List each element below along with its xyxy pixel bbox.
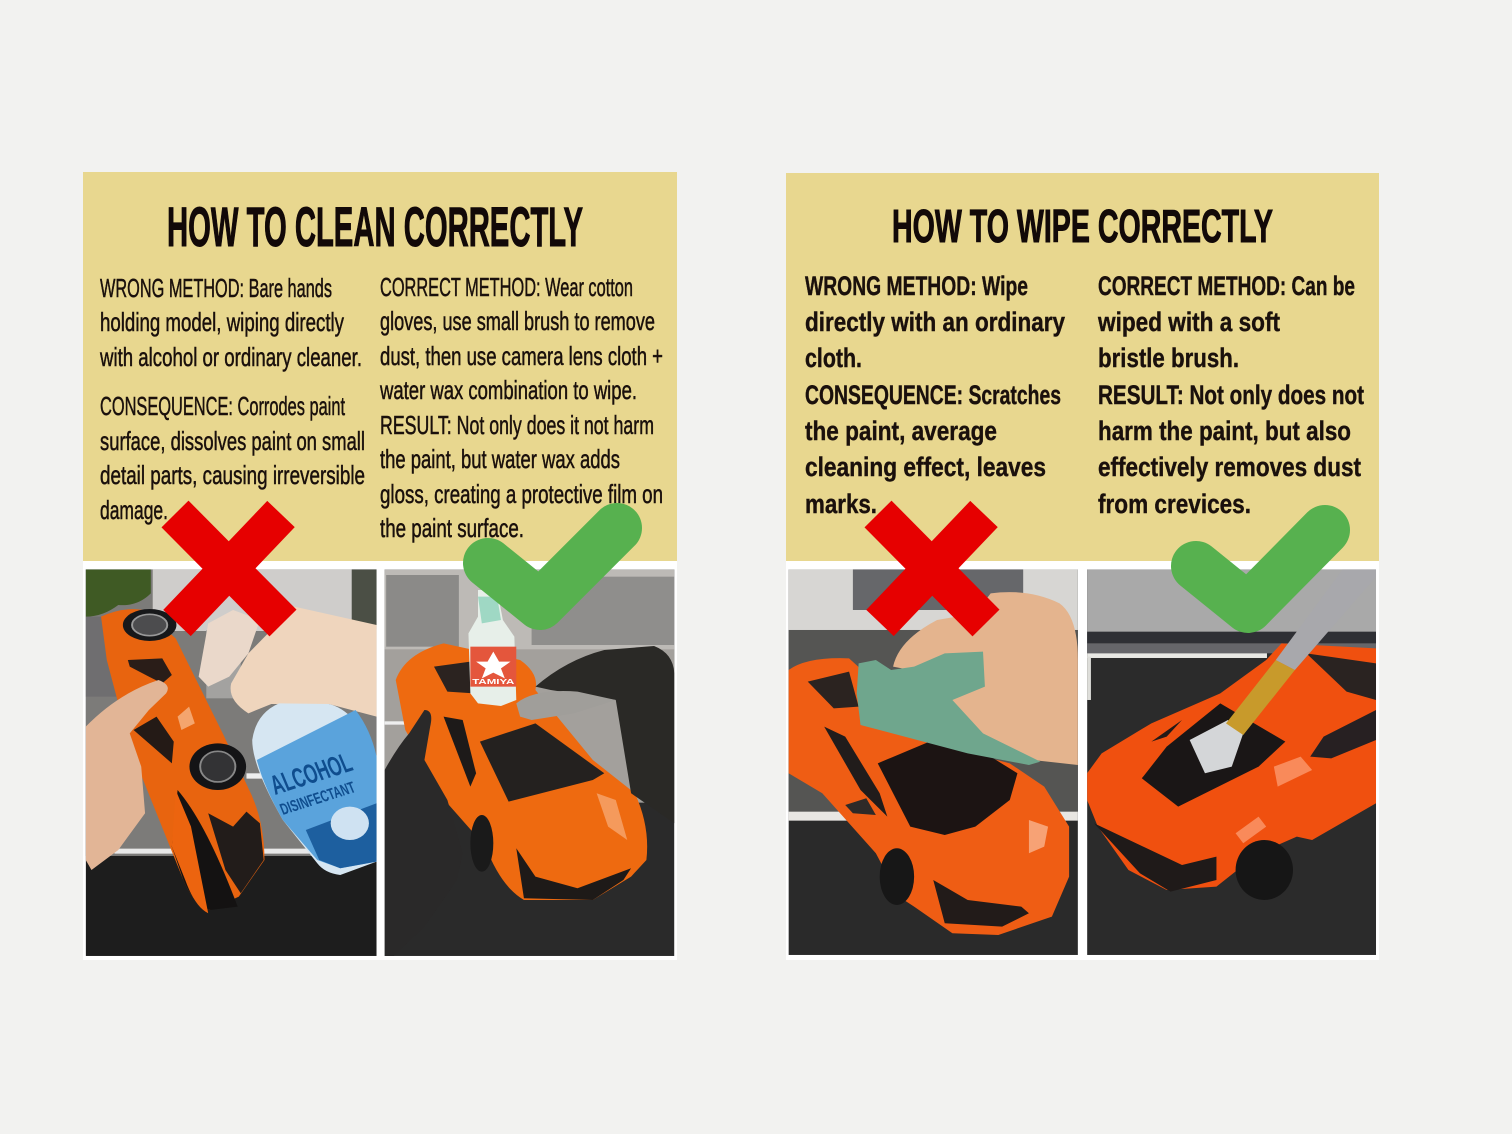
text block: correct method and result: the paint, but water wax adds [380,444,620,474]
text block: correct method and result: water wax combination to wipe. [379,375,637,405]
photo: hand wiping model with cloth [789,569,1078,955]
photo: bare hands spraying alcohol on model: ALCOHOL [266,747,357,801]
text block: correct method and result: RESULT: Not only does not [1098,380,1364,410]
text block: wrong method and consequence: holding model, wiping directly [100,307,344,337]
photo: soft bristle brush on model [1087,569,1376,955]
text block: wrong method and consequence: CONSEQUENCE: Corrodes paint [100,391,345,421]
text block: wrong method and consequence [99,273,365,525]
text block: correct method and result: bristle brush. [1098,343,1239,373]
icon: green check [488,528,617,605]
text block: wrong method and consequence [805,271,1065,519]
icon: red cross [878,514,986,623]
panel background yellow [786,173,1379,561]
text block: correct method and result: effectively removes dust [1098,452,1361,482]
text block: wrong method and consequence: damage. [100,495,168,525]
text block: wrong method and consequence: surface, dissolves paint on small [100,426,365,456]
icon: red cross [175,514,283,623]
panel: how to wipe correctly [786,173,1379,960]
text block: correct method and result: dust, then use camera lens cloth + [380,341,663,371]
icon: green check [1196,530,1325,608]
text block: wrong method and consequence: CONSEQUENCE: Scratches [805,380,1061,410]
text block: wrong method and consequence: cleaning effect, leaves [805,452,1046,482]
text block: correct method and result: the paint surface. [380,513,524,543]
photo: gloved hands with water wax on model: TAMIYA [472,677,515,686]
panel: how to clean correctly [83,172,677,960]
text block: correct method and result [1097,271,1364,519]
text block: wrong method and consequence: detail parts, causing irreversible [100,460,365,490]
text block: correct method and result: RESULT: Not only does it not harm [380,410,654,440]
text block: correct method and result: CORRECT METHOD: Can be [1098,271,1355,301]
text block: correct method and result: harm the paint, but also [1098,416,1351,446]
text block: wrong method and consequence: marks. [805,489,877,519]
text block: correct method and result: gloves, use small brush to remove [380,306,655,336]
text block: wrong method and consequence: the paint, average [805,416,997,446]
text block: wrong method and consequence: WRONG METHOD: Bare hands [100,273,332,303]
text block: wrong method and consequence: cloth. [805,343,862,373]
panel background yellow [83,172,677,561]
photo: bare hands spraying alcohol on model [86,569,377,956]
text block: correct method and result: wiped with a soft [1097,307,1280,337]
heading: how to wipe correctly: HOW TO WIPE CORRECTLY [892,200,1273,252]
heading: how to clean correctly: HOW TO CLEAN CORRECTLY [167,195,583,258]
photo: gloved hands with water wax on model [385,569,674,956]
text block: wrong method and consequence: directly with an ordinary [805,307,1065,337]
text block: correct method and result: from crevices. [1098,489,1251,519]
text block: wrong method and consequence: with alcohol or ordinary cleaner. [99,342,362,372]
text block: wrong method and consequence: WRONG METHOD: Wipe [805,271,1028,301]
text block: correct method and result: gloss, creating a protective film on [380,479,663,509]
text block: correct method and result: CORRECT METHOD: Wear cotton [380,272,633,302]
text block: correct method and result [379,272,663,543]
panel photo frame [786,561,1379,960]
panel photo frame [83,561,677,960]
photo: bare hands spraying alcohol on model: DISINFECTANT [277,778,358,818]
